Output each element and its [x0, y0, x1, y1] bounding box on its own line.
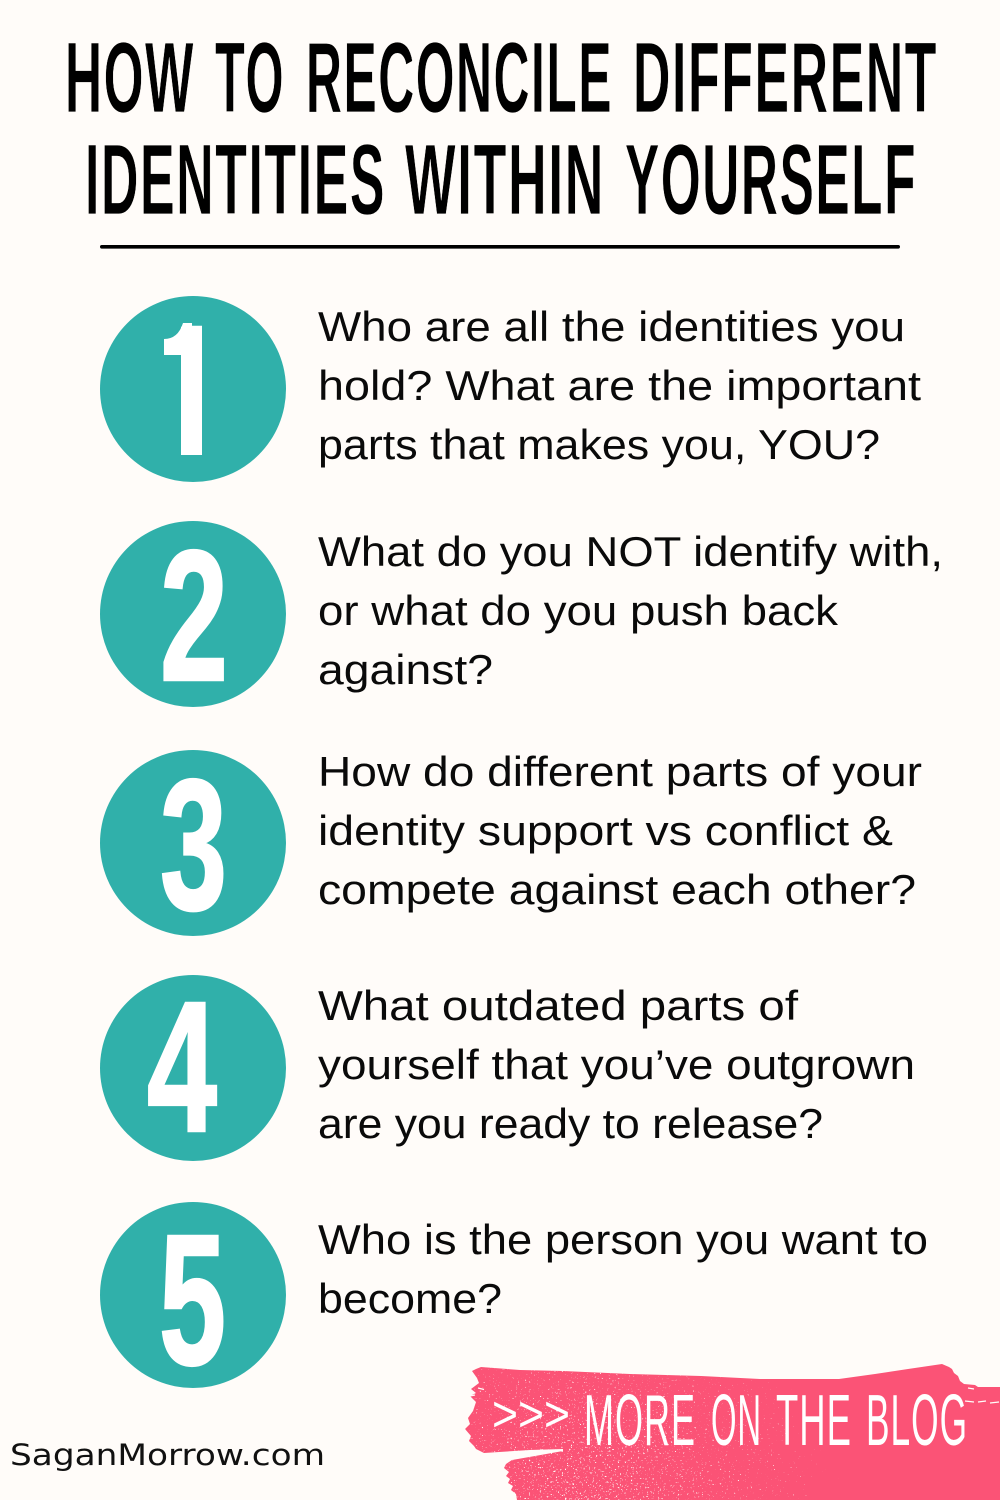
title: RECONCILE — [306, 22, 613, 134]
brush stroke background — [465, 1364, 1000, 1500]
item 4 text: yourself that you’ve outgrown — [318, 1041, 915, 1088]
item 1 text: hold? What are the important — [318, 362, 921, 409]
item 3 text — [318, 748, 922, 913]
title: TO — [215, 22, 285, 134]
number badge 2: 2 — [160, 513, 228, 720]
item 3 text: How do different parts of your — [318, 748, 922, 795]
item 2 text: against? — [318, 646, 493, 693]
item 4 text — [318, 982, 915, 1147]
website credit: SaganMorrow.com — [10, 1438, 325, 1472]
item 3 text: compete against each other? — [318, 866, 916, 913]
item 2 — [100, 513, 943, 720]
number badge 1: 1 — [144, 288, 234, 495]
item 5 — [100, 1197, 928, 1404]
item 5 text: Who is the person you want to — [318, 1216, 928, 1263]
item 1 text: parts that makes you, YOU? — [318, 421, 880, 468]
item 1 text: Who are all the identities you — [318, 303, 905, 350]
banner text: THE — [776, 1381, 852, 1461]
banner text: >>> — [492, 1386, 570, 1442]
number badge 3: 3 — [160, 742, 227, 949]
title: HOW — [65, 22, 195, 134]
title: IDENTITIES — [85, 124, 386, 236]
number badge 5: 5 — [159, 1197, 226, 1404]
item 3 — [100, 742, 922, 949]
item 4 text: are you ready to release? — [318, 1100, 823, 1147]
banner text: ON — [711, 1381, 762, 1461]
brush speckles — [466, 1367, 839, 1500]
item 2 text: What do you NOT identify with, — [318, 528, 943, 575]
item 5 text: become? — [318, 1275, 502, 1322]
item 4 — [100, 964, 915, 1171]
item 2 text — [318, 528, 943, 693]
item 5 text — [318, 1216, 928, 1322]
brush scratch marks — [470, 1388, 999, 1403]
item 1 — [100, 296, 921, 482]
number badge 2 — [100, 513, 286, 720]
item 1 text — [318, 303, 921, 468]
number badge 3 — [100, 742, 286, 949]
number badge 4: 4 — [147, 964, 217, 1171]
number badge 5 — [100, 1197, 286, 1404]
item 4 text: What outdated parts of — [318, 982, 798, 1029]
item 2 text: or what do you push back — [318, 587, 839, 634]
banner text — [492, 1381, 968, 1461]
number badge 1 — [100, 296, 286, 482]
call to action banner — [465, 1364, 1000, 1500]
banner text: MORE — [584, 1381, 696, 1461]
title: WITHIN — [405, 124, 605, 236]
number badge 4 — [100, 964, 286, 1171]
item 3 text: identity support vs conflict & — [318, 807, 893, 854]
title — [65, 22, 938, 236]
